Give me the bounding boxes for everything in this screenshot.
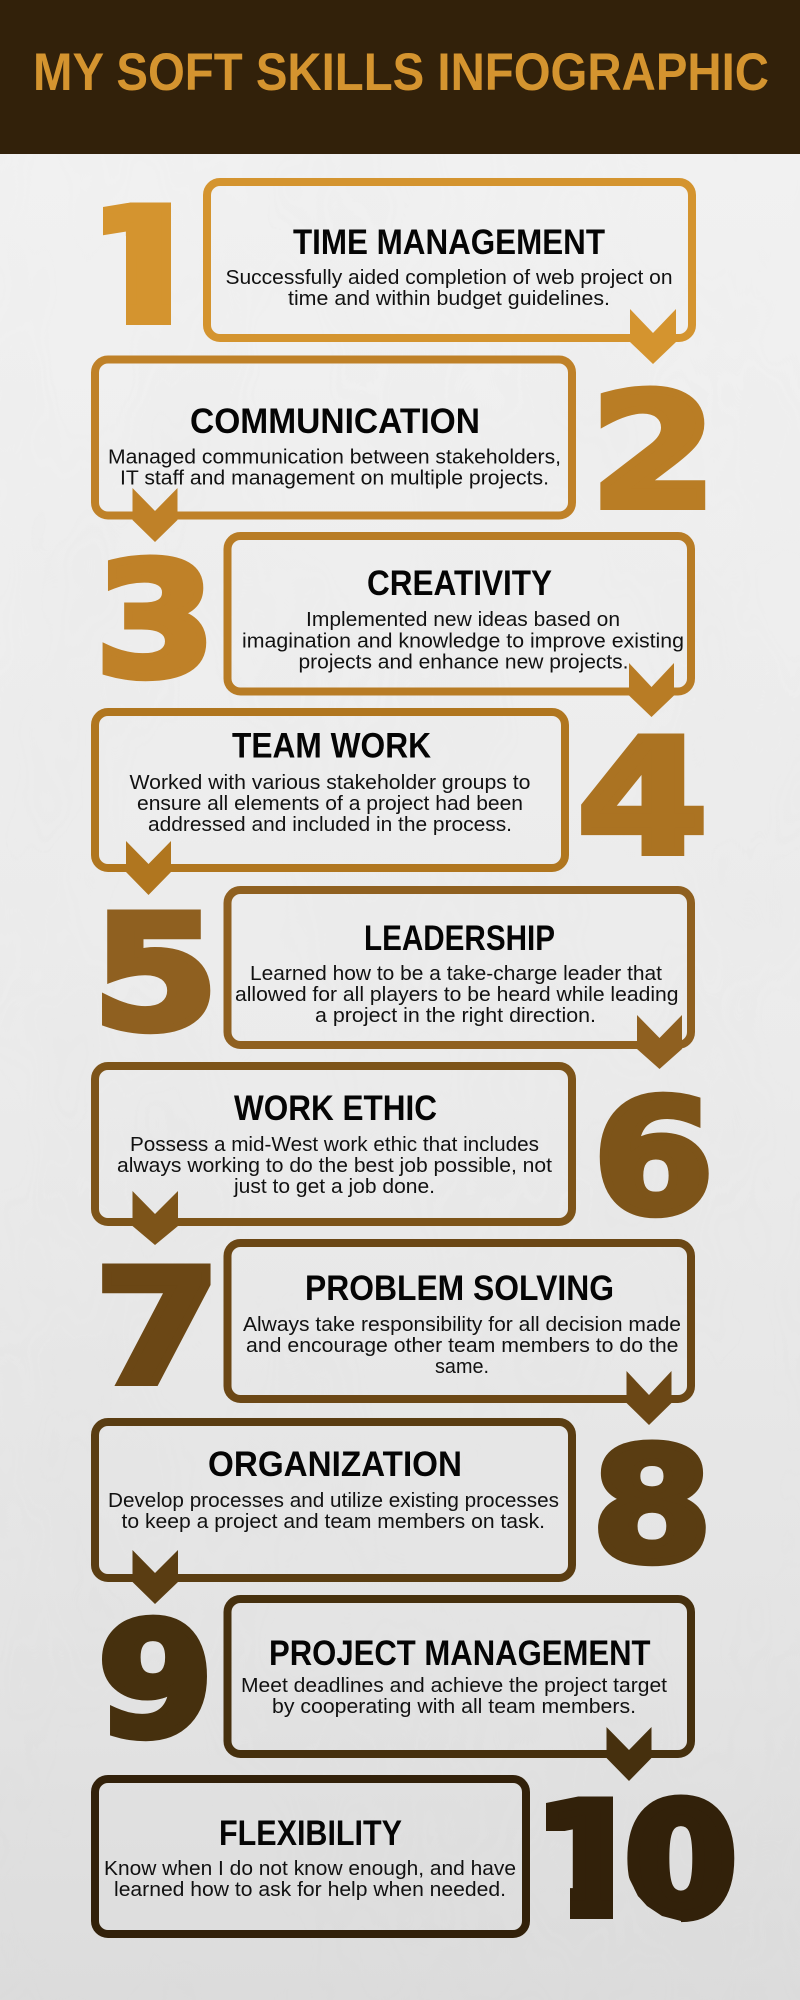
description <box>235 962 678 1027</box>
panel: flexibility <box>95 1779 526 1934</box>
heading: FLEXIBILITY <box>219 1814 402 1853</box>
description: Possess a mid-West work ethic that includes <box>130 1133 539 1156</box>
heading: CREATIVITY <box>367 564 552 603</box>
heading: COMMUNICATION <box>190 402 480 441</box>
arrow <box>626 1371 672 1425</box>
description: Worked with various stakeholder groups to <box>130 771 530 794</box>
description: ensure all elements of a project had been <box>137 792 523 815</box>
panel: work ethic <box>95 1066 572 1245</box>
heading: TEAM WORK <box>232 726 431 766</box>
description <box>241 1674 667 1718</box>
description <box>226 266 672 310</box>
number 1: 1 <box>74 176 214 358</box>
description: Meet deadlines and achieve the project target <box>241 1674 667 1697</box>
description: Know when I do not know enough, and have <box>104 1857 516 1880</box>
arrow <box>637 1015 682 1069</box>
heading: PROJECT MANAGEMENT <box>269 1634 650 1673</box>
arrow <box>606 1727 652 1781</box>
panel: organization <box>95 1422 572 1604</box>
description <box>242 608 684 674</box>
number 7: 7 <box>95 1236 220 1419</box>
description: Implemented new ideas based on <box>306 608 620 631</box>
number 10: 1 <box>534 1772 644 1950</box>
panel: team work <box>95 712 565 895</box>
arrow <box>126 841 171 895</box>
arrow <box>630 309 676 364</box>
description: just to get a job done. <box>233 1175 435 1198</box>
description <box>130 771 530 836</box>
description: time and within budget guidelines. <box>288 287 610 310</box>
description: Successfully aided completion of web project on <box>226 266 672 289</box>
heading: PROBLEM SOLVING <box>305 1269 614 1308</box>
description <box>117 1133 552 1198</box>
description: Always take responsibility for all decision made <box>243 1313 681 1336</box>
description: Learned how to be a take-charge leader that <box>250 962 662 985</box>
description <box>104 1857 516 1901</box>
arrow <box>132 488 178 542</box>
number 3: 3 <box>95 529 216 712</box>
arrow <box>132 1191 178 1245</box>
description: projects and enhance new projects. <box>298 650 628 674</box>
description: always working to do the best job possible, not <box>117 1154 552 1177</box>
arrow <box>629 663 674 717</box>
description: same. <box>435 1355 489 1378</box>
description: learned how to ask for help when needed. <box>114 1878 506 1901</box>
description: Develop processes and utilize existing processes <box>108 1489 559 1512</box>
description: and encourage other team members to do the <box>246 1334 678 1357</box>
title banner <box>0 0 800 154</box>
description: a project in the right direction. <box>315 1004 596 1027</box>
panel: problem solving <box>228 1243 691 1425</box>
heading: WORK ETHIC <box>234 1089 437 1128</box>
number 2: 2 <box>591 360 716 543</box>
number 10: 0 <box>626 1772 736 1950</box>
description: by cooperating with all team members. <box>272 1695 636 1718</box>
number 10 <box>546 1794 734 1922</box>
description <box>243 1313 681 1378</box>
number 6: 6 <box>593 1066 714 1249</box>
description: imagination and knowledge to improve existing <box>242 630 684 652</box>
heading: ORGANIZATION <box>208 1445 462 1484</box>
description: Managed communication between stakeholders, <box>108 446 561 468</box>
number 4: 4 <box>578 706 707 889</box>
description <box>108 1489 559 1533</box>
description <box>108 446 561 490</box>
heading: LEADERSHIP <box>364 919 555 958</box>
panel: time management <box>207 182 692 364</box>
number 5: 5 <box>93 882 218 1065</box>
arrow <box>132 1550 178 1604</box>
description: to keep a project and team members on task. <box>122 1510 545 1533</box>
number 9: 9 <box>98 1590 213 1773</box>
panel: communication <box>95 360 572 542</box>
number 8: 8 <box>592 1414 712 1597</box>
description: allowed for all players to be heard while leading <box>235 983 678 1006</box>
panel: leadership <box>228 890 691 1069</box>
panel: project management <box>228 1599 691 1781</box>
description: IT staff and management on multiple projects. <box>120 466 549 490</box>
panel: creativity <box>228 536 691 717</box>
heading: TIME MANAGEMENT <box>293 223 605 262</box>
description: addressed and included in the process. <box>148 813 512 836</box>
